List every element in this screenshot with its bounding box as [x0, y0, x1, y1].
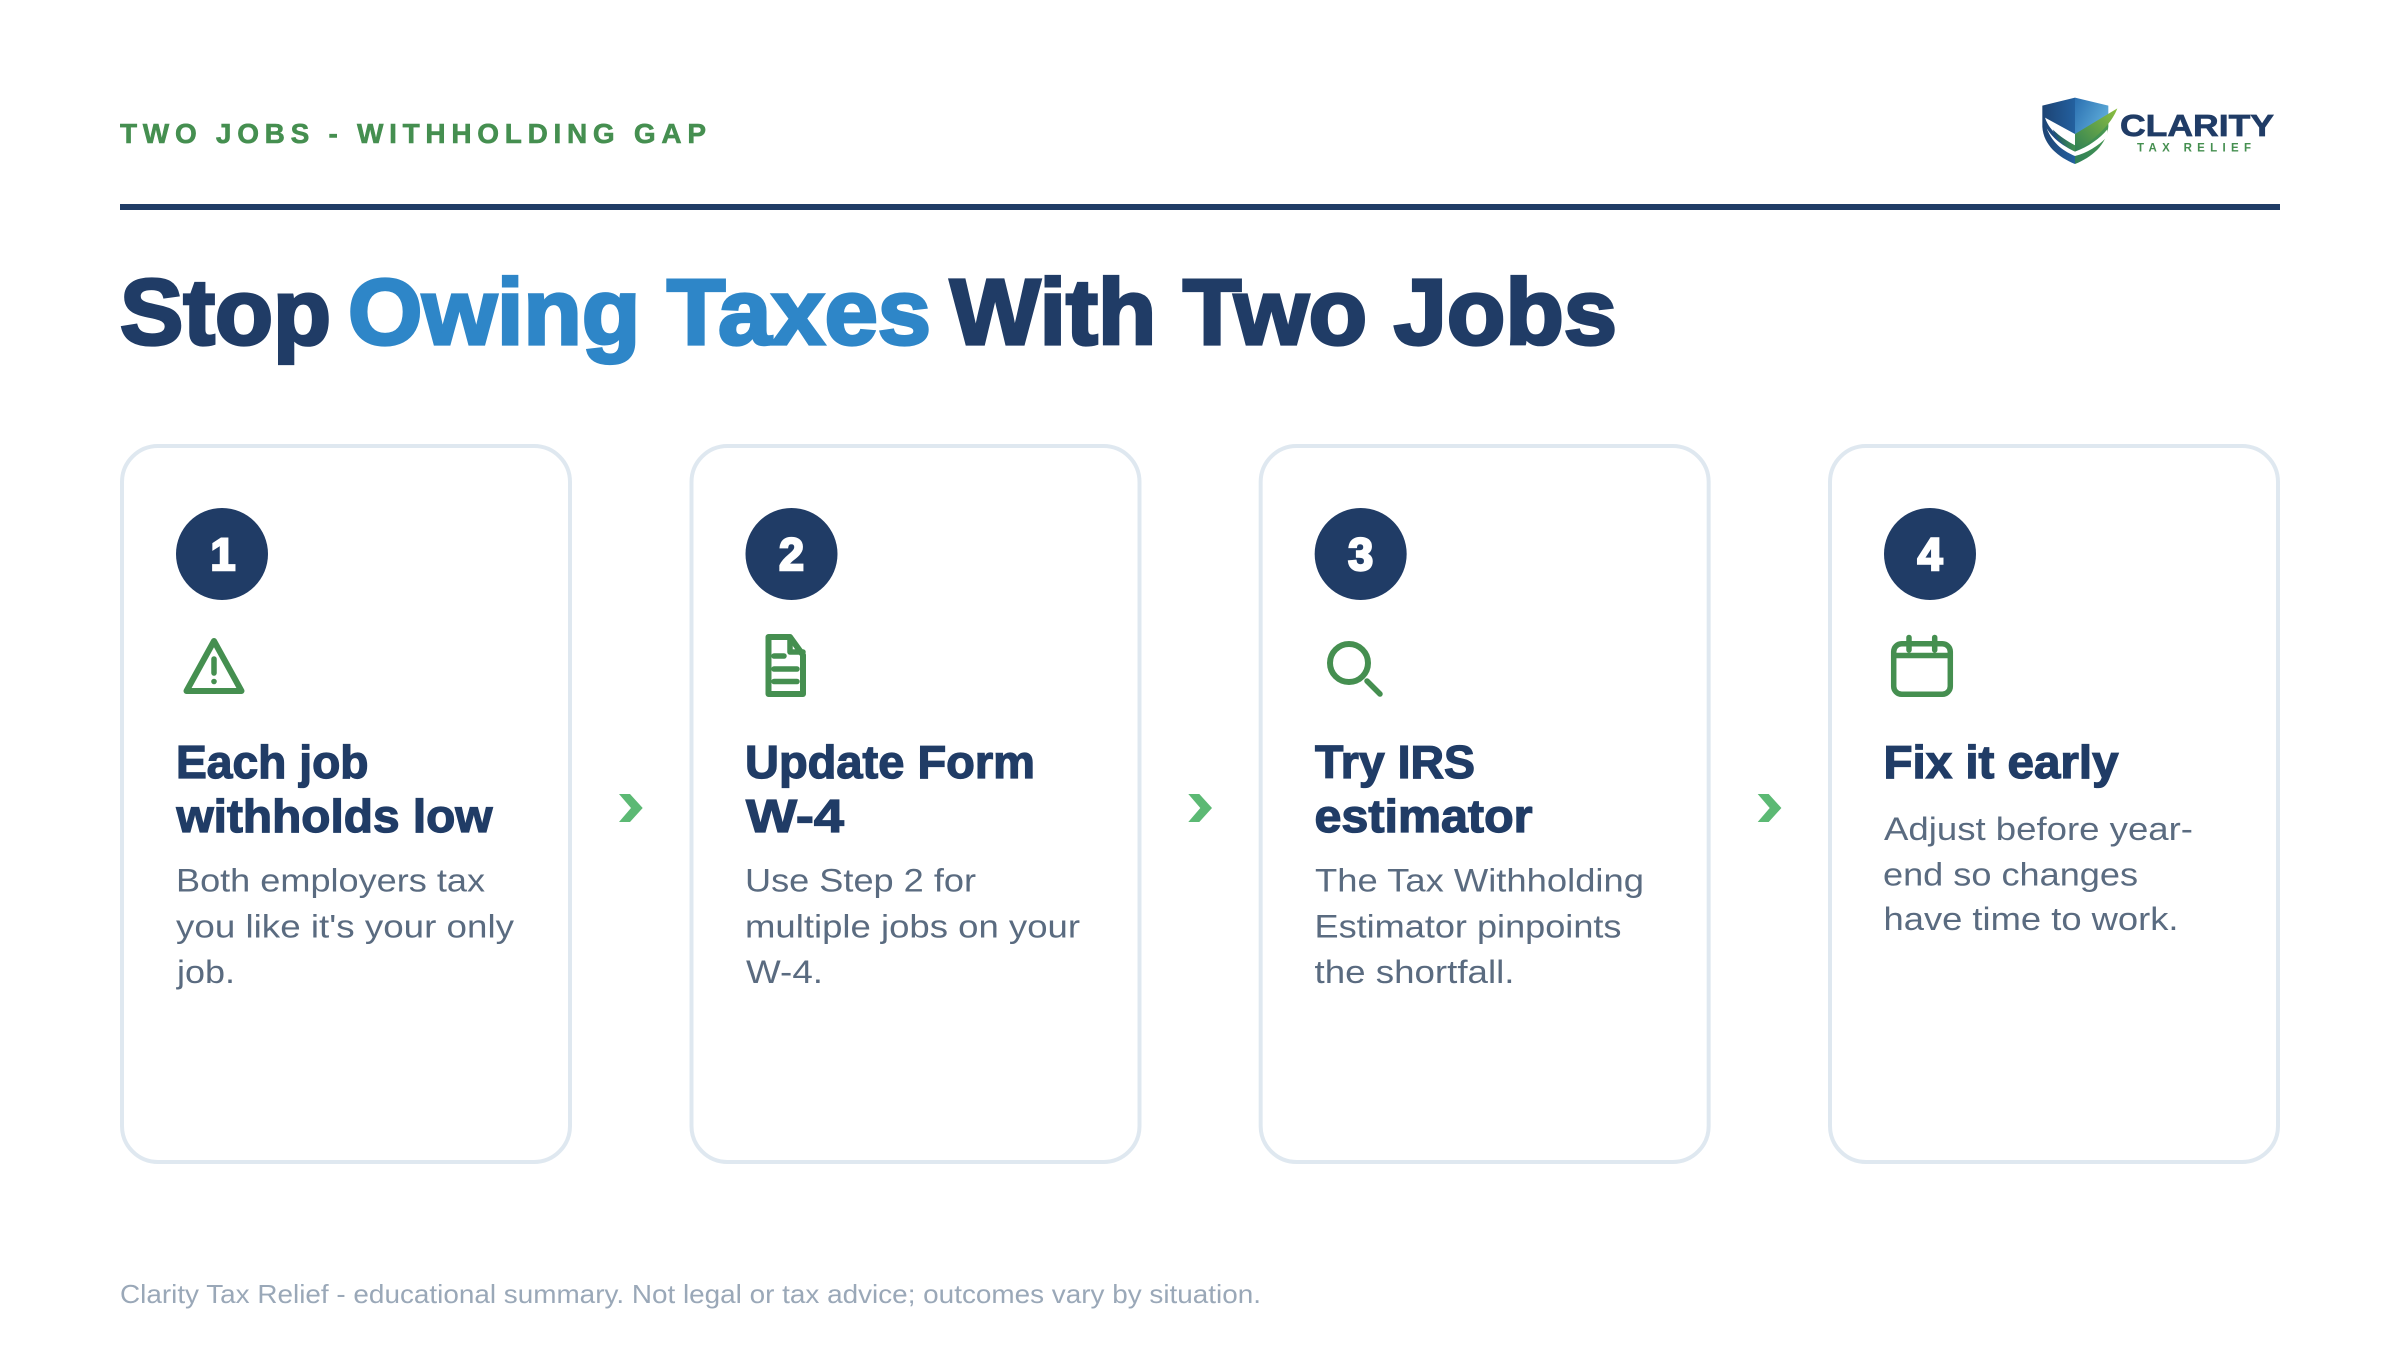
logo wordmark: CLARITY [2120, 108, 2274, 143]
step number 4 [1884, 508, 1976, 600]
step number 2 [746, 508, 838, 600]
icon: document [768, 637, 803, 694]
heading: Each job [176, 736, 368, 788]
panel: step 2 [692, 446, 1140, 1162]
body text: Estimator pinpoints [1314, 908, 1622, 944]
icon: calendar [1894, 638, 1950, 694]
heading [745, 736, 1035, 842]
body text: The Tax Withholding [1315, 863, 1644, 899]
arrow 3 [1758, 794, 1781, 822]
title: Owing Taxes [348, 260, 931, 364]
body text [1883, 811, 2193, 937]
title [120, 260, 1617, 364]
heading: Try IRS [1315, 736, 1475, 788]
body text: you like it's your only [176, 908, 515, 944]
body text [176, 863, 515, 990]
body text: W-4. [746, 954, 823, 990]
body text [745, 863, 1080, 990]
panel: step 3 [1261, 446, 1709, 1162]
arrow 1 [619, 794, 643, 822]
body text: Both employers tax [176, 863, 485, 899]
arrow 2 [1188, 794, 1212, 822]
body text: job. [176, 954, 235, 990]
step number 1 [176, 508, 268, 600]
icon: magnifier [1330, 644, 1380, 694]
title: With Two Jobs [950, 260, 1617, 364]
body text: the shortfall. [1314, 954, 1514, 990]
body text [1314, 863, 1644, 990]
step number 3 [1315, 508, 1407, 600]
heading: W-4 [746, 790, 844, 842]
title: Stop [120, 260, 331, 364]
panel: step 4 [1830, 446, 2278, 1162]
step number 3: 3 [1348, 529, 1373, 580]
icon: logo shield [2042, 98, 2117, 164]
step number 2: 2 [779, 529, 804, 580]
footer disclaimer: Clarity Tax Relief - educational summary. Not legal or tax advice; outcomes vary by situation. [120, 1279, 1261, 1309]
panel: step 1 [122, 446, 570, 1162]
body text: end so changes [1883, 857, 2138, 893]
step number 4: 4 [1917, 529, 1943, 580]
body text: Use Step 2 for [745, 863, 976, 899]
step number 1: 1 [210, 529, 236, 580]
heading [175, 736, 493, 842]
body text: multiple jobs on your [745, 908, 1080, 944]
body text: have time to work. [1884, 901, 2178, 937]
heading: Update Form [745, 736, 1035, 788]
logo: Clarity Tax Relief [2042, 98, 2274, 164]
heading: withholds low [175, 790, 493, 842]
heading [1314, 736, 1532, 842]
heading: Fix it early [1884, 736, 2119, 788]
heading: estimator [1314, 790, 1532, 842]
eyebrow label: TWO JOBS - WITHHOLDING GAP [120, 118, 706, 149]
body text: Adjust before year- [1884, 811, 2193, 847]
logo tagline: TAX RELIEF [2137, 143, 2251, 155]
icon: warning triangle [186, 641, 242, 691]
